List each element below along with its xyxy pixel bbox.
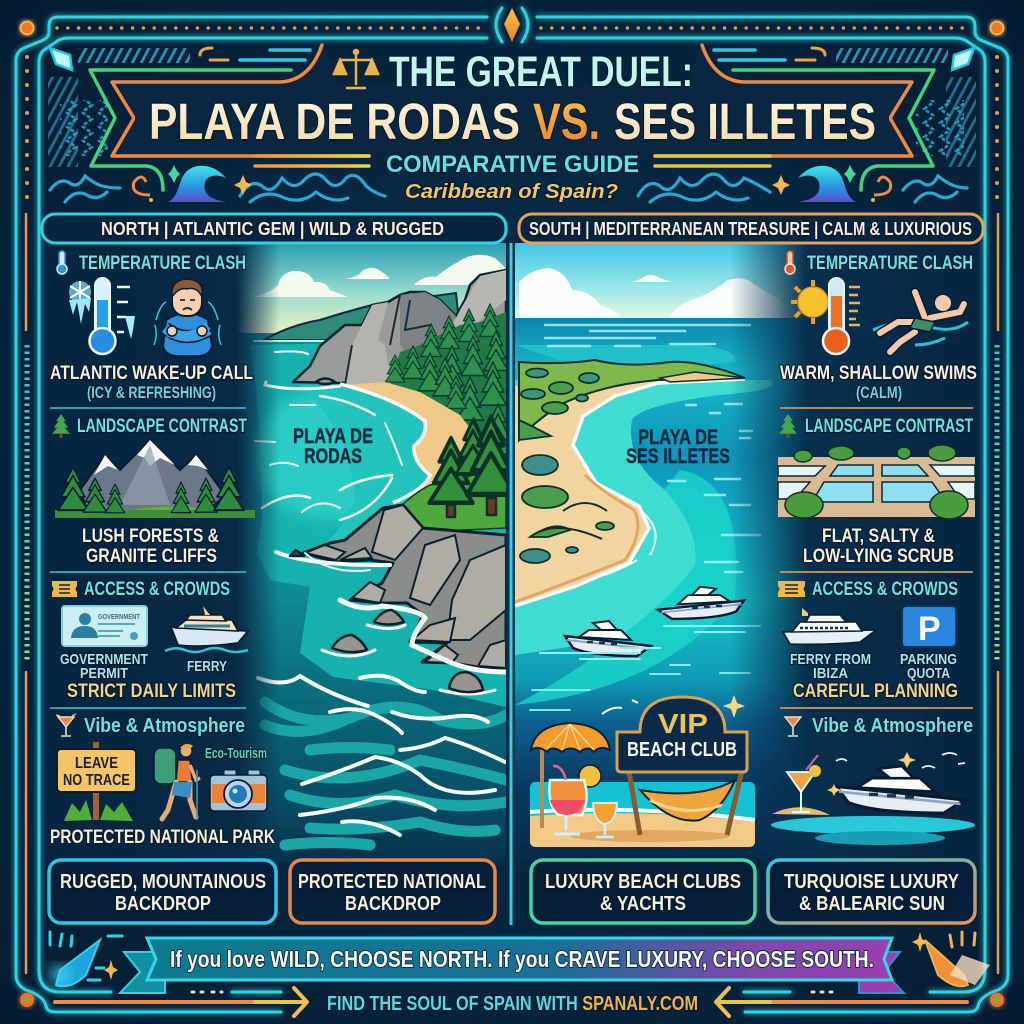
forest [390, 312, 506, 458]
callout: turquoise luxury [768, 860, 975, 923]
icon: cocktail [56, 714, 76, 736]
title: THE GREAT DUEL: [389, 48, 693, 96]
callout: protected national backdrop: BACKDROP [345, 893, 441, 915]
sign: leave no trace: NO TRACE [63, 772, 130, 789]
panel: access north: ACCESS & CROWDS [84, 579, 230, 600]
distant hills [264, 305, 385, 340]
panel: landscape north: GRANITE CLIFFS [86, 546, 217, 567]
illustration: salt flats [778, 445, 975, 519]
panel: temperature north [50, 251, 253, 402]
sign: leave no trace [57, 742, 136, 821]
clouds [519, 268, 780, 318]
panel: temperature north: (ICY & REFRESHING) [87, 383, 216, 402]
callout: luxury beach clubs: & YACHTS [600, 893, 686, 915]
lower cliffs [303, 505, 506, 668]
icon: sparkles and swirls [133, 165, 891, 202]
panel: access south: ACCESS & CROWDS [812, 579, 958, 600]
title: SES ILLETES [614, 93, 876, 150]
divider [510, 243, 512, 925]
illustration: VIP beach club [530, 695, 755, 847]
sign: leave no trace: LEAVE [75, 755, 118, 772]
panel: access north: STRICT DAILY LIMITS [67, 681, 236, 702]
panel: temperature south: (CALM) [856, 383, 902, 402]
panel: access south: QUOTA [907, 665, 950, 682]
beach sand [345, 382, 470, 503]
panel: vibe south [771, 715, 975, 845]
column header: north: NORTH | ATLANTIC GEM | WILD & RUGGED [101, 219, 444, 239]
callout: protected national backdrop: PROTECTED NATIONAL [298, 871, 486, 893]
rocks [290, 378, 483, 692]
lower sea waves [258, 676, 506, 845]
ribbon: If you love WILD, CHOOSE NORTH. If you CRAVE LUXURY, CHOOSE SOUTH. [170, 946, 874, 972]
column header: south [519, 214, 983, 243]
left text fade [40, 243, 280, 863]
panel: access south: CAREFUL PLANNING [793, 681, 958, 702]
panel: vibe north: PROTECTED NATIONAL PARK [50, 827, 275, 848]
scrub bushes [519, 368, 614, 563]
illustration: VIP beach club: VIP [658, 708, 708, 739]
panel: landscape south: LOW-LYING SCRUB [803, 546, 954, 567]
large trees [429, 417, 515, 517]
icon: breaking waves [168, 166, 856, 202]
arrow: right [716, 988, 967, 1016]
icon: parking sign [902, 606, 956, 648]
title banner [90, 45, 934, 190]
label: Playa de Rodas: RODAS [304, 445, 362, 468]
subtitle: COMPARATIVE GUIDE [386, 151, 639, 178]
icon: sun [791, 280, 828, 324]
illustration: VIP beach club: BEACH CLUB [627, 739, 737, 761]
icon: hiker [154, 744, 200, 820]
icon: government permit card: GOVERNMENT [98, 614, 141, 621]
icon: government permit card [62, 606, 147, 646]
panel: Playa de Rodas scene [40, 243, 515, 863]
icon: tree [52, 414, 70, 438]
panel: temperature north: ATLANTIC WAKE-UP CALL [50, 363, 253, 384]
panel: vibe north: Eco-Tourism [205, 745, 267, 762]
icon: ticket [778, 581, 805, 597]
sand tongue [515, 372, 745, 605]
panel: access north: PERMIT [80, 665, 128, 682]
icon: cruise ferry [783, 608, 876, 644]
panel: landscape south: FLAT, SALTY & [822, 526, 935, 547]
icon: small thermometer [57, 251, 67, 274]
title [149, 48, 876, 150]
icon: cocktail [785, 717, 801, 736]
panel: access south: PARKING [900, 651, 957, 668]
callout: turquoise luxury: & BALEARIC SUN [799, 893, 945, 915]
sign [617, 697, 747, 772]
panel: vibe north [50, 714, 275, 848]
panel: temperature north: TEMPERATURE CLASH [79, 253, 246, 274]
icon: centre diamond [504, 8, 520, 42]
decoration: waves [50, 174, 967, 202]
title: VS. [533, 93, 600, 150]
callout: protected national backdrop [290, 860, 495, 923]
main cliff [293, 270, 506, 383]
callout: rugged mountainous backdrop [49, 860, 276, 923]
icon: snowflake with ice [69, 281, 91, 324]
right text fade [730, 243, 985, 863]
label: Playa de Ses Illetes: PLAYA DE [638, 426, 718, 449]
label: Playa de Ses Illetes: SES ILLETES [626, 445, 730, 468]
panel: landscape north [52, 414, 255, 567]
illustration: mountains and forest [55, 440, 255, 518]
icon: parking sign: P [918, 610, 941, 648]
callout: turquoise luxury: TURQUOISE LUXURY [784, 871, 960, 893]
island vegetation [519, 360, 745, 440]
icon: shivering man [154, 279, 221, 356]
icon: ticket [52, 581, 77, 597]
icon: camera [210, 770, 267, 811]
illustration: yacht at sunset [771, 752, 975, 845]
panel: access north [52, 579, 248, 702]
panel: temperature south: WARM, SHALLOW SWIMS [780, 363, 977, 384]
icon: left sparkle [50, 932, 122, 986]
cocktail [579, 765, 601, 787]
subtitle [386, 151, 639, 203]
surf and foam [255, 351, 506, 694]
subtitle: Caribbean of Spain? [405, 181, 618, 203]
grass mound [403, 474, 506, 530]
panel: access north: FERRY [187, 658, 227, 675]
footer text: FIND THE SOUL OF SPAIN WITH SPANALY.COM [327, 993, 698, 1015]
sea reflections [545, 325, 760, 572]
umbrella [531, 723, 610, 752]
icon: right sparkle [912, 932, 990, 986]
ribbon [120, 938, 904, 993]
callout: rugged mountainous backdrop: BACKDROP [115, 893, 211, 915]
icon: hot thermometer [823, 278, 860, 354]
callout: luxury beach clubs: LUXURY BEACH CLUBS [545, 871, 741, 893]
label: Playa de Ses Illetes [626, 426, 730, 468]
shallow turquoise water [515, 470, 736, 705]
panel: access north: GOVERNMENT [60, 651, 148, 668]
icon: tree [779, 414, 797, 438]
panel: access south [778, 579, 958, 702]
yachts [658, 587, 744, 619]
hammock [628, 766, 743, 835]
panel: access south: IBIZA [813, 665, 848, 682]
callout: rugged mountainous backdrop: RUGGED, MOUNTAINOUS [60, 871, 266, 893]
icon: ferry [165, 606, 248, 652]
icon: scales of justice [334, 50, 378, 88]
title: PLAYA DE RODAS [149, 93, 520, 150]
panel: Ses Illetes scene [515, 243, 985, 863]
icon: small thermometer [785, 251, 795, 274]
column header: north [42, 214, 506, 243]
label: Playa de Rodas: PLAYA DE [293, 425, 373, 448]
panel: access south: FERRY FROM [790, 651, 871, 668]
panel: vibe south: Vibe & Atmosphere [812, 715, 973, 737]
label: Playa de Rodas [293, 425, 373, 468]
panel: temperature south: TEMPERATURE CLASH [807, 253, 973, 274]
panel: vibe north: Vibe & Atmosphere [84, 715, 245, 737]
clouds [254, 255, 505, 297]
icon: cold thermometer [90, 278, 135, 354]
icon: swimmer [873, 292, 968, 352]
callout: luxury beach clubs [531, 860, 755, 923]
arrow: left [55, 988, 307, 1016]
decoration: hatch and chevrons [48, 48, 976, 167]
panel: temperature south [780, 251, 977, 402]
panel: landscape south [778, 414, 975, 567]
panel: landscape north: LANDSCAPE CONTRAST [77, 416, 247, 437]
panel: landscape north: LUSH FORESTS & [82, 526, 219, 547]
